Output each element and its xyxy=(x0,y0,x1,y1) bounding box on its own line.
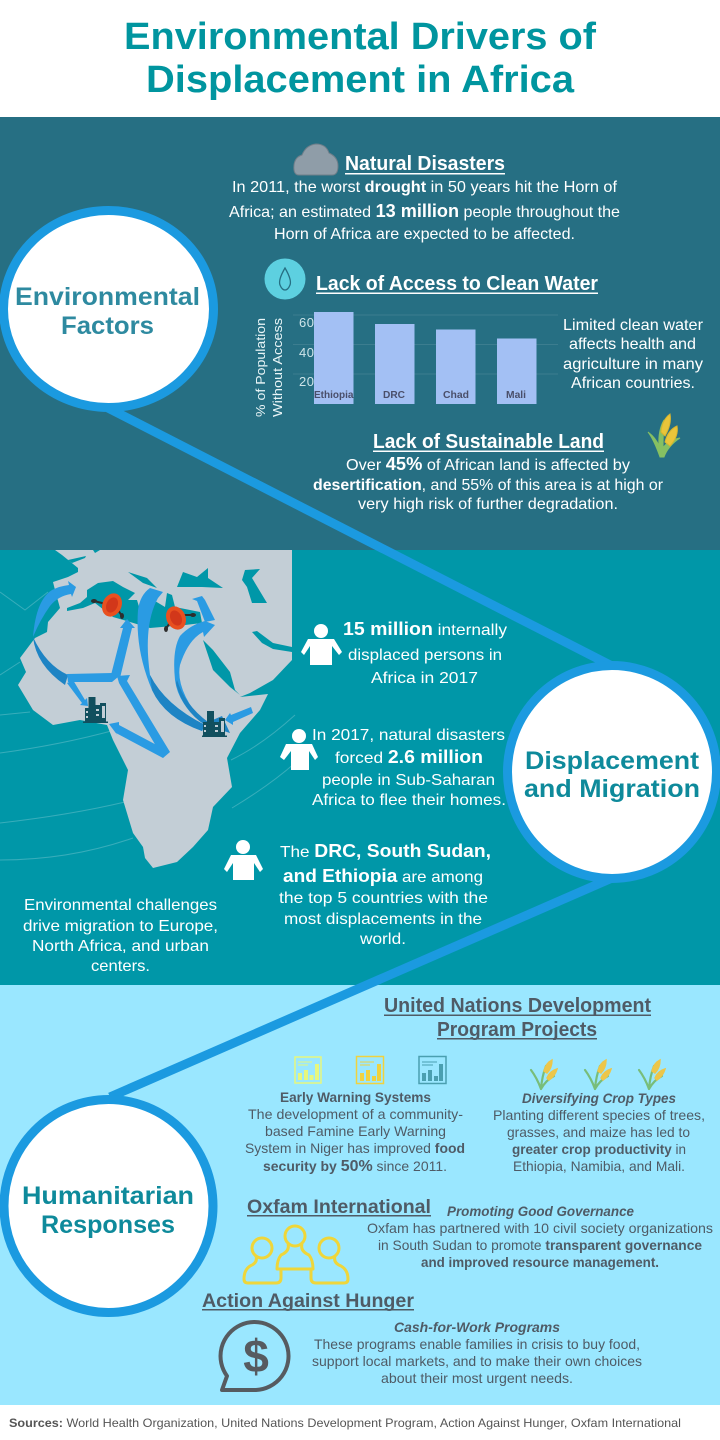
text: environmental challenges xyxy=(23,897,218,975)
text: promoting good governance: Oxfam has partnered with 10 civil society organizations xyxy=(367,1220,713,1236)
panel: displacement and migration background xyxy=(0,550,720,985)
circle: environmental factors: Environmental xyxy=(15,283,200,311)
icon: boat right xyxy=(162,603,196,633)
stat: 15 million xyxy=(343,619,507,687)
bar chart: population without access to clean water xyxy=(253,312,558,417)
icon: chart pale yellow xyxy=(295,1057,321,1083)
text: environmental challenges: North Africa, and urban xyxy=(32,938,209,955)
text: clean water xyxy=(563,317,704,392)
text: cash-for-work programs: support local markets, and to make their own choices xyxy=(312,1353,642,1369)
text: cash-for-work programs: Cash-for-Work Programs xyxy=(394,1319,560,1335)
category labels: Chad xyxy=(443,390,469,401)
stat: 2.6 million: Africa to flee their homes. xyxy=(312,792,506,809)
icon: group of people xyxy=(244,1226,348,1283)
icon: dollar speech bubble: $ xyxy=(243,1330,269,1382)
circle: displacement and migration: Displacement xyxy=(525,747,700,775)
stat: top 5 countries: most displacements in the xyxy=(284,911,482,928)
icon: water drop xyxy=(264,258,306,300)
circle: environmental factors: Factors xyxy=(61,312,154,340)
bars xyxy=(314,312,536,404)
stat: top 5 countries xyxy=(279,841,491,948)
connector: environmental to displacement xyxy=(108,408,612,666)
text: sustainable land xyxy=(313,454,664,513)
icon: chart teal xyxy=(419,1056,446,1084)
stat: 2.6 million: forced 2.6 million xyxy=(335,747,483,767)
title xyxy=(124,16,596,101)
text: early warning systems: The development of a community- xyxy=(248,1106,463,1122)
icon: person 1 xyxy=(301,624,342,665)
text: early warning systems: based Famine Early Warning xyxy=(265,1123,446,1139)
icon: boat left xyxy=(91,590,126,620)
text: clean water: agriculture in many xyxy=(563,356,703,373)
icon: crop 2 xyxy=(585,1060,611,1089)
sources footer: Sources: World Health Organization, United Nations Development Program, Action Against Hunger, Oxfam International xyxy=(9,1416,681,1430)
icon: dollar speech bubble xyxy=(221,1322,289,1390)
text: environmental challenges: drive migration to Europe, xyxy=(23,918,218,935)
icon: crop 3 xyxy=(639,1060,665,1089)
text: natural disasters: In 2011, the worst drought in 50 years hit the Horn of xyxy=(232,179,618,196)
text: clean water: African countries. xyxy=(571,375,695,392)
y axis labels: 60 xyxy=(299,315,314,330)
panel: environmental factors background xyxy=(0,117,720,550)
heading: sustainable land: Lack of Sustainable Land xyxy=(373,431,604,453)
circle: humanitarian responses: Responses xyxy=(41,1211,175,1239)
icon: person 2 xyxy=(280,729,318,770)
circle: displacement and migration: and Migration xyxy=(524,775,700,803)
stat: 2.6 million: In 2017, natural disasters xyxy=(312,727,505,744)
circle: displacement and migration xyxy=(508,666,716,878)
heading: oxfam international: Oxfam International xyxy=(247,1197,431,1218)
title: Displacement in Africa xyxy=(146,59,575,101)
migration arrows xyxy=(33,581,253,758)
connector: displacement to humanitarian xyxy=(110,878,612,1097)
text: clean water: Limited clean water xyxy=(563,317,704,334)
text: promoting good governance xyxy=(367,1203,713,1270)
text: cash-for-work programs xyxy=(312,1319,642,1386)
circle: humanitarian responses xyxy=(4,1100,213,1312)
text: cash-for-work programs: These programs enable families in crisis to buy food, xyxy=(314,1336,640,1352)
land xyxy=(18,550,292,868)
text: diversifying crop types: Planting different species of trees, xyxy=(493,1107,705,1123)
icon: city right xyxy=(202,711,227,737)
category labels xyxy=(314,390,526,401)
text: promoting good governance: and improved resource management. xyxy=(421,1254,659,1270)
text: clean water: affects health and xyxy=(569,336,696,353)
text: sustainable land: very high risk of further degradation. xyxy=(358,496,618,513)
stat: top 5 countries: and Ethiopia are among xyxy=(283,866,483,886)
stat: 15 million: 15 million internally xyxy=(343,619,507,639)
heading: natural disasters: Natural Disasters xyxy=(345,153,505,175)
icon: city left xyxy=(83,697,108,723)
category labels: DRC xyxy=(383,390,405,401)
heading: action against hunger: Action Against Hunger xyxy=(202,1291,415,1312)
stat: top 5 countries: The DRC, South Sudan, xyxy=(280,841,491,861)
map of Africa with migration routes xyxy=(0,550,295,868)
text: diversifying crop types: Diversifying Crop Types xyxy=(522,1090,676,1106)
text: cash-for-work programs: about their most urgent needs. xyxy=(381,1370,573,1386)
seas xyxy=(67,550,292,695)
y axis labels: 40 xyxy=(299,345,314,360)
heading: clean water: Lack of Access to Clean Water xyxy=(316,273,598,295)
stat: 2.6 million: people in Sub-Saharan xyxy=(322,772,495,789)
stat: 2.6 million xyxy=(312,727,506,809)
y axis labels xyxy=(299,315,314,389)
icon: crop xyxy=(648,414,680,457)
stat: 15 million: Africa in 2017 xyxy=(371,670,478,687)
heading: united nations development program projects: United Nations Development xyxy=(384,995,651,1017)
text: environmental challenges: Environmental challenges xyxy=(24,897,217,914)
text: promoting good governance: Promoting Good Governance xyxy=(447,1203,634,1219)
heading: united nations development program projects: Program Projects xyxy=(437,1019,597,1041)
circle: humanitarian responses: Humanitarian xyxy=(22,1182,194,1210)
category labels: Mali xyxy=(506,390,526,401)
stat: top 5 countries: the top 5 countries with the xyxy=(279,890,488,907)
text: diversifying crop types xyxy=(493,1090,705,1174)
text: early warning systems: security by 50% since 2011. xyxy=(263,1158,447,1175)
text: diversifying crop types: grasses, and maize has led to xyxy=(507,1124,690,1140)
y axis title xyxy=(253,317,285,417)
icon: cloud xyxy=(294,144,338,175)
text: natural disasters: Horn of Africa are expected to be affected. xyxy=(274,226,575,243)
text: diversifying crop types: greater crop productivity in xyxy=(512,1141,686,1157)
y axis title: Without Access xyxy=(270,317,285,417)
text: promoting good governance: in South Sudan to promote transparent governance xyxy=(378,1237,702,1253)
y axis labels: 20 xyxy=(299,374,314,389)
text: sustainable land: desertification, and 55% of this area is at high or xyxy=(313,477,664,494)
circle: environmental factors xyxy=(4,210,214,408)
icon: person 3 xyxy=(224,840,263,880)
stat: 15 million: displaced persons in xyxy=(348,647,502,664)
text: diversifying crop types: Ethiopia, Namibia, and Mali. xyxy=(513,1158,685,1174)
text: natural disasters: Africa; an estimated 13 million people throughout the xyxy=(229,201,620,221)
text: early warning systems: Early Warning Systems xyxy=(280,1089,431,1105)
y axis title: % of Population xyxy=(253,318,268,417)
text: natural disasters xyxy=(229,179,620,243)
panel: humanitarian responses background xyxy=(0,985,720,1405)
heading: united nations development program projects xyxy=(384,995,651,1041)
text: early warning systems xyxy=(245,1089,465,1175)
text: early warning systems: System in Niger has improved food xyxy=(245,1140,465,1156)
category labels: Ethiopia xyxy=(314,390,354,401)
title: Environmental Drivers of xyxy=(124,16,596,58)
icon: crop 1 xyxy=(531,1060,557,1089)
text: sustainable land: Over 45% of African land is affected by xyxy=(346,454,630,474)
text: environmental challenges: centers. xyxy=(91,958,150,975)
icon: chart yellow xyxy=(356,1056,384,1084)
stat: top 5 countries: world. xyxy=(359,931,406,948)
